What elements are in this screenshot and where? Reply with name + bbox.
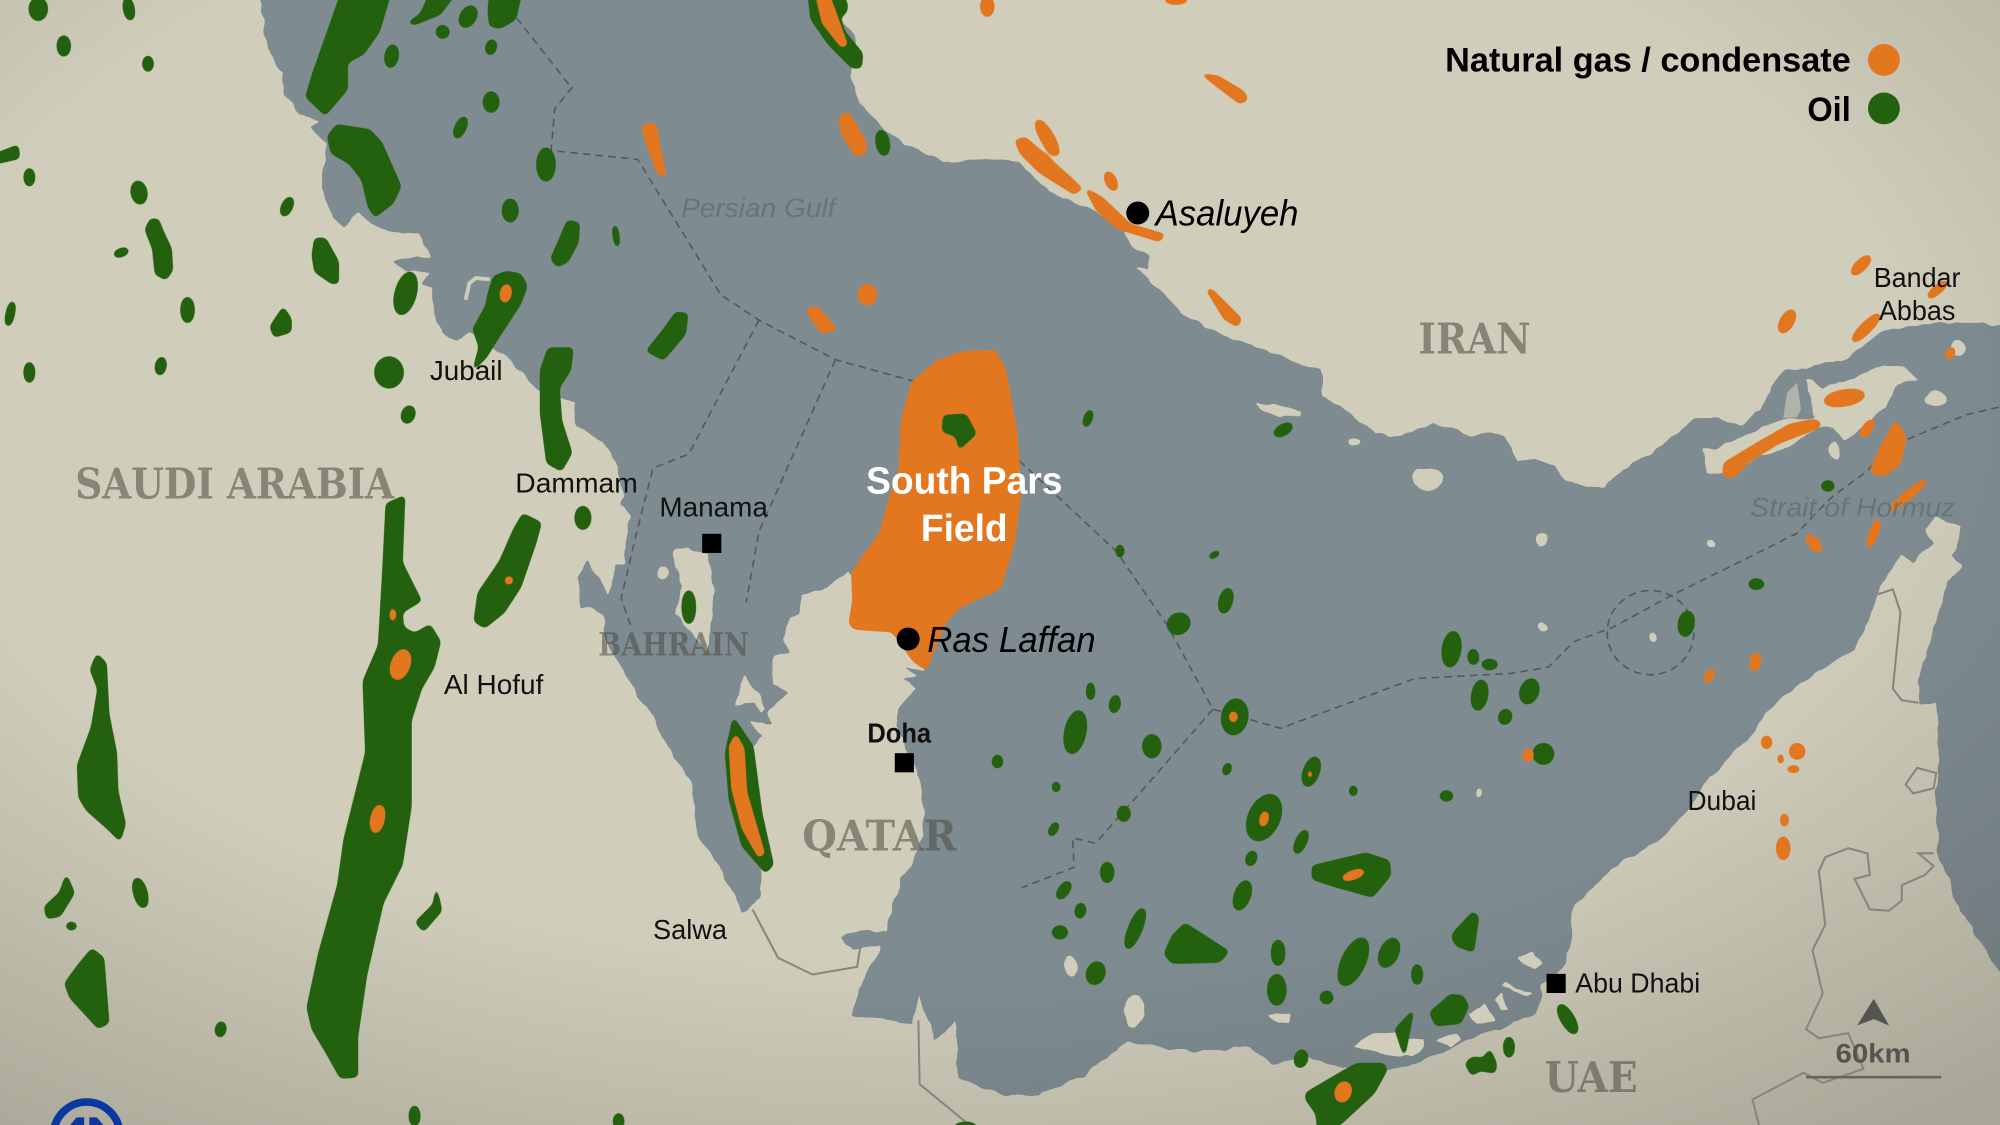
marker: Doha: Doha <box>867 717 931 748</box>
scale bar: 60km <box>1835 1038 1911 1068</box>
country labels: SAUDI ARABIA <box>75 459 395 509</box>
gas field: South Pars <box>849 351 1020 670</box>
oil pocket inside South Pars <box>943 415 976 449</box>
city labels: Bandar <box>1874 262 1960 293</box>
oil field: long Saudi onshore field <box>307 496 440 1078</box>
oil fields: small scattered blobs, west <box>456 3 480 30</box>
islands: Hawar <box>736 675 765 713</box>
legend entry: oil: Oil <box>1807 91 1851 129</box>
country labels: IRAN <box>1418 313 1531 363</box>
legend entry: natural gas: Natural gas / condensate <box>1445 41 1851 79</box>
scale bar <box>1806 1038 1941 1077</box>
country labels <box>75 313 1638 1102</box>
water labels <box>681 193 1956 523</box>
gas fields: Iran coast and offshore <box>642 124 666 176</box>
water labels: Persian Gulf <box>681 193 838 223</box>
maritime boundaries <box>517 18 2000 888</box>
legend entry: oil <box>1807 91 1900 129</box>
marker: Asaluyeh: Asaluyeh <box>1154 194 1298 234</box>
island: Qeshm <box>1702 366 1920 474</box>
mangrove patch north of Qeshm <box>1783 383 1801 418</box>
city labels: Dubai <box>1688 785 1756 816</box>
legend <box>1445 41 1900 129</box>
coastal islands <box>1255 402 1300 417</box>
label: South Pars Field: Field <box>921 507 1008 550</box>
natural gas and condensate fields <box>368 0 1957 1104</box>
label: South Pars Field <box>866 460 1062 550</box>
city labels <box>430 262 1960 945</box>
city labels: Al Hofuf <box>444 669 544 700</box>
gas pockets inside oil fields <box>499 284 512 303</box>
oil field: western Saudi field <box>78 654 125 841</box>
marker: Manama: Manama <box>659 492 768 523</box>
marker: Manama <box>659 492 768 553</box>
city labels: Salwa <box>653 914 727 945</box>
marker: Ras Laffan: Ras Laffan <box>927 620 1096 660</box>
label: South Pars Field: South Pars <box>866 460 1062 503</box>
oil fields: Qatar/UAE offshore, large <box>1165 923 1228 963</box>
oil fields: northern Saudi offshore <box>306 0 393 115</box>
national borders on land <box>753 589 1936 1125</box>
island: Bahrain <box>675 547 713 651</box>
country labels: UAE <box>1545 1052 1638 1102</box>
marker: Abu Dhabi: Abu Dhabi <box>1575 967 1700 998</box>
islands and coastal land <box>658 341 1966 1056</box>
marker: Doha <box>867 717 931 772</box>
city labels: Dammam <box>515 467 638 498</box>
island: Tarut coastal arc <box>466 278 490 300</box>
oil fields: eastern small blobs <box>1216 587 1235 615</box>
city labels: Abbas <box>1879 295 1955 326</box>
logo: Anadolu Agency <box>54 1102 120 1125</box>
city labels: Jubail <box>430 355 503 386</box>
oil field: Salwa bay <box>726 718 773 872</box>
water labels: Strait of Hormuz <box>1750 493 1956 523</box>
north arrow <box>1857 999 1889 1026</box>
country labels: QATAR <box>802 811 958 861</box>
country labels: BAHRAIN <box>598 626 749 664</box>
